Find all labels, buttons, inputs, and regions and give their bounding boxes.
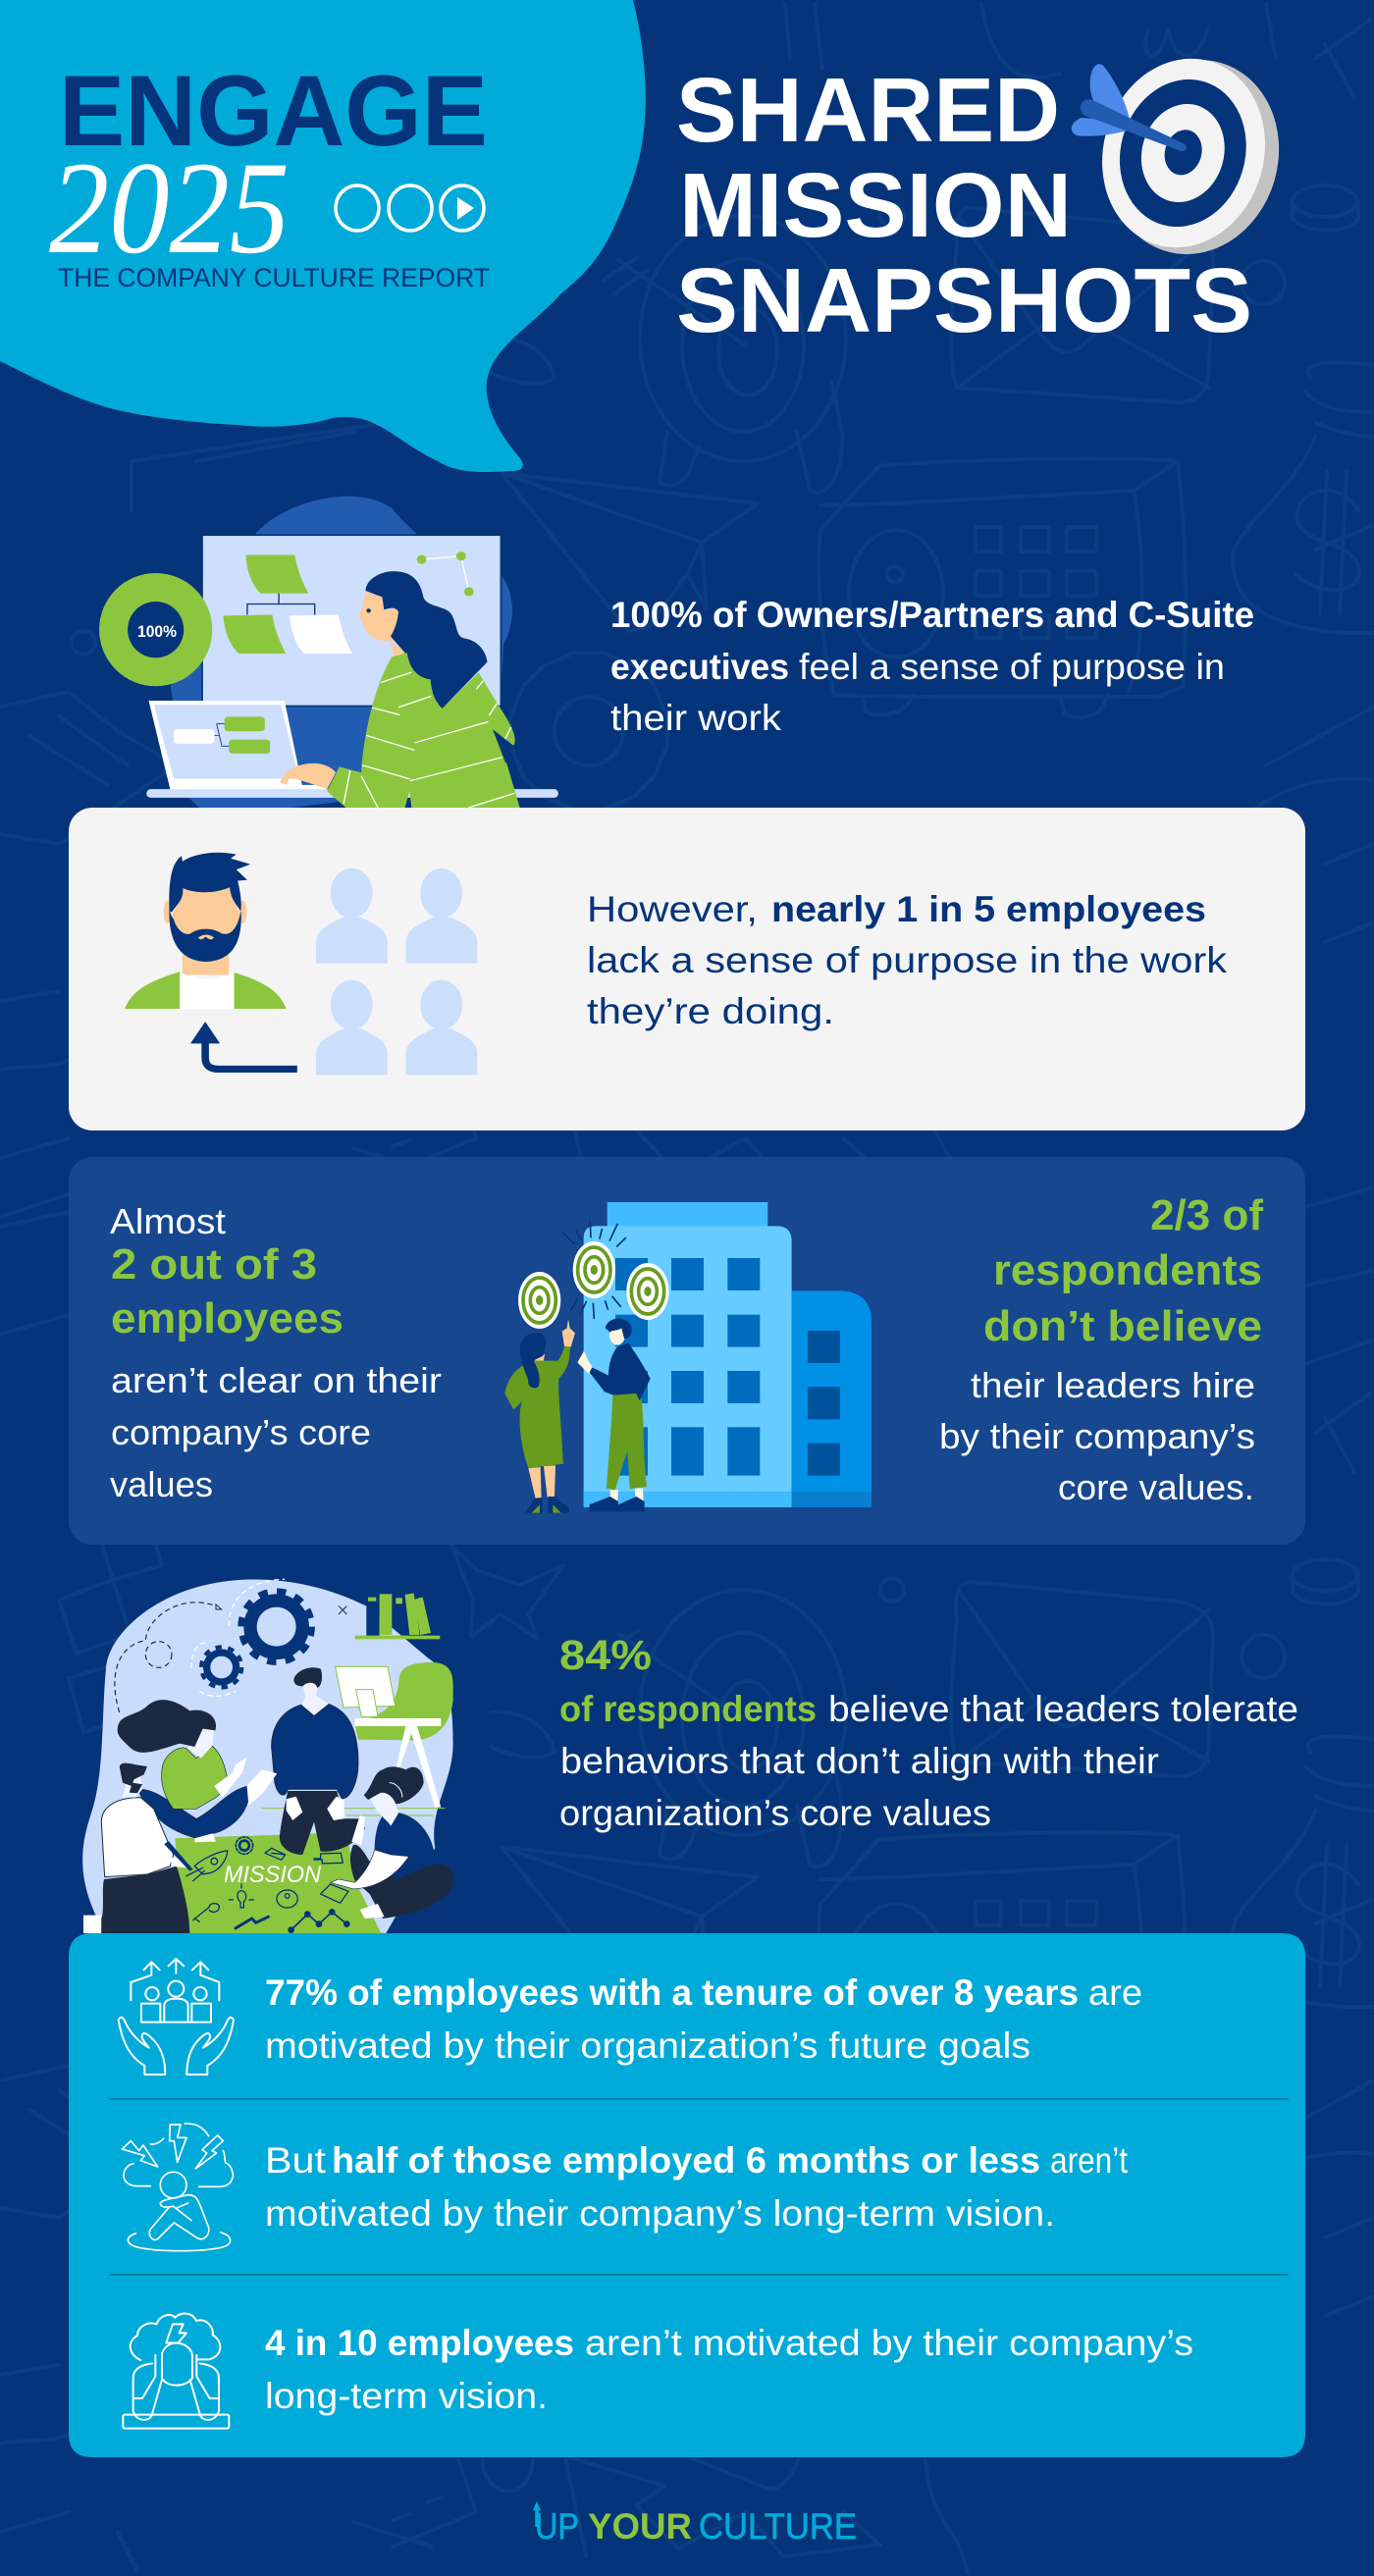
text: 2 out of 3 employees: values (110, 1464, 213, 1504)
text: half of those employed: motivated by their company’s long-term vision. (265, 2193, 1055, 2234)
text: 2/3 of respondents: their leaders hire (971, 1365, 1255, 1405)
text: half of those employed: half of those employed 6 months or less (332, 2140, 1040, 2181)
icon: person under stress (122, 2124, 233, 2251)
text: 2/3 of respondents: 2/3 of (1150, 1191, 1263, 1239)
text: 84% of respondents: organization’s core values (559, 1793, 991, 1833)
logo: Up Your Culture: YOUR (588, 2506, 692, 2547)
icon: arrow (191, 1023, 297, 1069)
speech bubble header (0, 0, 646, 472)
text: half of those employed: But (265, 2140, 327, 2181)
text: however: nearly 1 in 5 employees (771, 889, 1206, 929)
logo: Up Your Culture: CULTURE (699, 2506, 857, 2547)
text: 100% of owners (610, 595, 1254, 738)
illustration: team around mission mat (82, 1579, 453, 1933)
text: 4 in 10 employees: long-term vision. (265, 2376, 548, 2416)
text: 2 out of 3 employees: 2 out of 3 (111, 1240, 317, 1288)
title: MISSION (679, 154, 1072, 256)
illustration: building with people and targets (504, 1202, 872, 1513)
text: 2 out of 3 employees: aren’t clear on their (111, 1360, 442, 1400)
title (676, 59, 1252, 351)
text: however (587, 889, 1228, 1031)
text: 77% of employees: are (1088, 1972, 1142, 2013)
text: 77% of employees: motivated by their organization’s future goals (265, 2025, 1030, 2066)
text: 2/3 of respondents: respondents (993, 1246, 1262, 1294)
text: 2 out of 3 employees: Almost (110, 1201, 226, 1241)
text: 2 out of 3 employees: employees (111, 1294, 344, 1342)
text: 84% of respondents: of respondents (559, 1689, 817, 1729)
left woman (118, 1700, 277, 1842)
panel: nearly 1 in 5 employees (69, 808, 1305, 1130)
illustration: woman at presentation board (99, 497, 558, 808)
text: 4 in 10 employees: aren’t motivated by their company’s (585, 2323, 1193, 2363)
logo: Up Your Culture: UP (535, 2506, 579, 2547)
text: half of those employed (265, 2140, 1129, 2234)
center person (272, 1667, 365, 1855)
text: half of those employed: aren’t (1050, 2140, 1129, 2181)
text: 84% of respondents: behaviors that don’t align with their (560, 1741, 1159, 1781)
logo: Engage 2025: ENGAGE (59, 55, 488, 167)
logo: Up Your Culture (533, 2501, 857, 2547)
text: 100% of owners: feel a sense of purpose in (799, 647, 1225, 687)
text: 2/3 of respondents: by their company’s (939, 1416, 1255, 1456)
text: however: However, (587, 889, 758, 929)
panel: core values (69, 1157, 1305, 1545)
right woman (331, 1766, 453, 1919)
text: 4 in 10 employees (265, 2323, 1193, 2416)
text: 77% of employees (265, 1972, 1142, 2066)
text: 100% of owners: executives (610, 647, 789, 687)
logo: Engage 2025 (49, 55, 490, 292)
donut label: 100% (137, 622, 177, 641)
laptop (146, 701, 558, 798)
icon: target with dart (1072, 39, 1301, 275)
text: 84% of respondents (559, 1632, 1298, 1833)
text: 4 in 10 employees: 4 in 10 employees (265, 2323, 574, 2363)
text: 77% of employees: 77% of employees with a tenure of over 8 years (265, 1972, 1079, 2013)
text: 2/3 of respondents (939, 1191, 1263, 1507)
text: 2 out of 3 employees (110, 1201, 442, 1504)
text: 2 out of 3 employees: company’s core (111, 1412, 371, 1452)
chart: 100% donut (99, 573, 212, 686)
icon: hands lifting team (119, 1959, 234, 2075)
mat label: MISSION (224, 1862, 322, 1888)
text: 2/3 of respondents: don’t believe (983, 1302, 1262, 1350)
text: 100% of owners: their work (610, 698, 782, 738)
text: 84% of respondents: 84% (559, 1632, 652, 1679)
panel: motivation (69, 1933, 1305, 2457)
icon: three circles and play (336, 185, 484, 231)
title: SNAPSHOTS (676, 249, 1252, 351)
logo: Engage 2025: 2025 (49, 135, 290, 282)
text: 84% of respondents: believe that leaders tolerate (828, 1689, 1298, 1729)
left man (83, 1763, 193, 1933)
text: however: lack a sense of purpose in the work (587, 940, 1228, 980)
icon: man and four people (125, 853, 477, 1075)
icon: head in hands under cloud (123, 2314, 229, 2429)
title: SHARED (676, 59, 1060, 161)
text: 100% of owners: 100% of Owners/Partners and C-Suite (610, 595, 1254, 635)
logo: Engage 2025: THE COMPANY CULTURE REPORT (58, 263, 490, 292)
text: 2/3 of respondents: core values. (1058, 1467, 1254, 1507)
text: however: they’re doing. (587, 991, 834, 1031)
